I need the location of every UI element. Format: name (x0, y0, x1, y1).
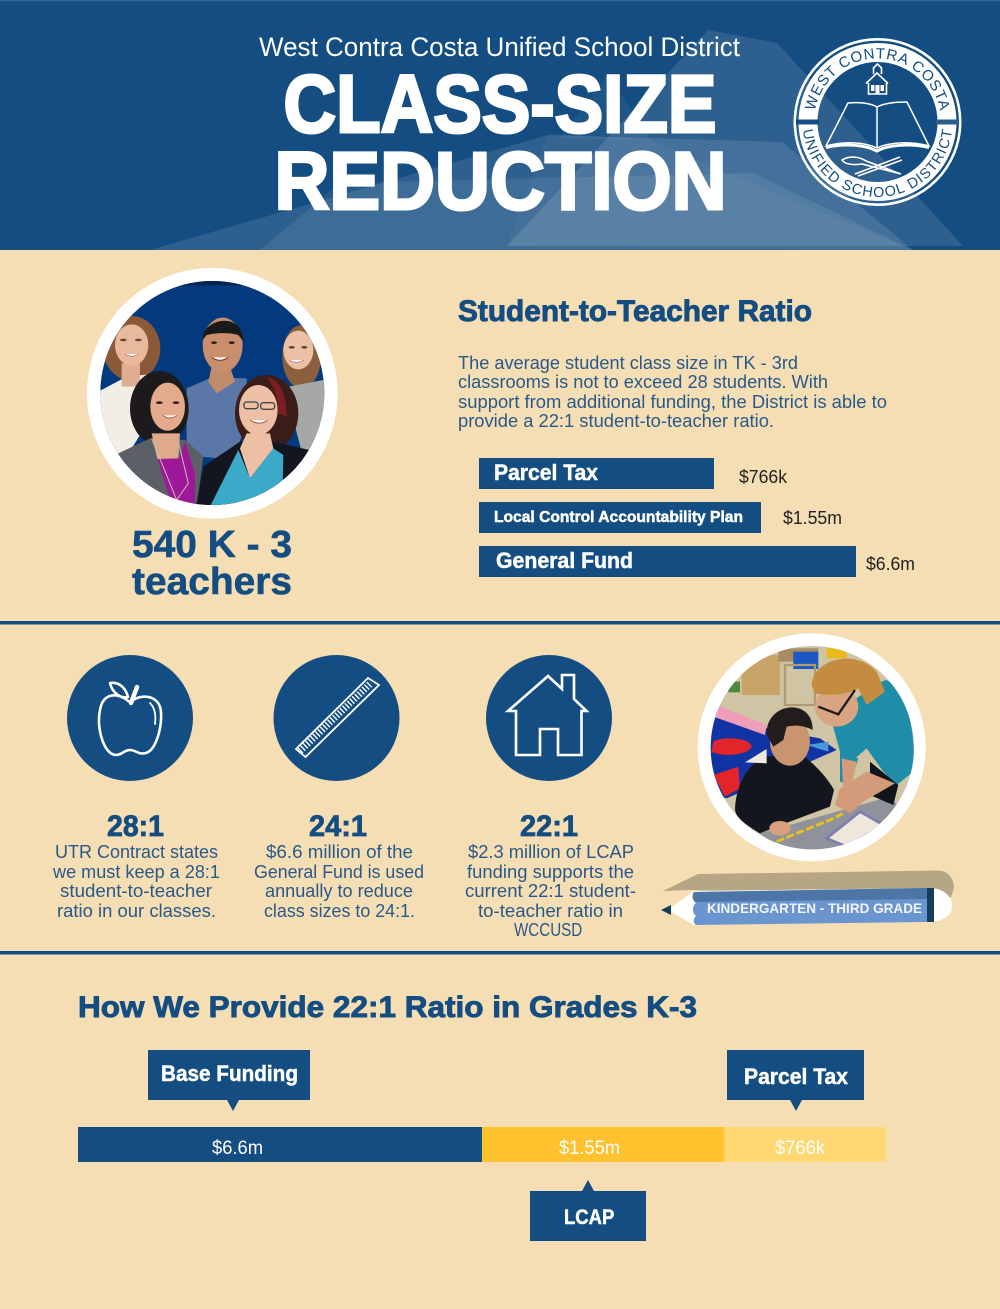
ratio column: 24:1: $6.6 million of the (266, 841, 413, 862)
ratio column: 24:1: annually to reduce (265, 880, 413, 901)
callout: base funding (148, 1050, 310, 1111)
seal pencil and compass (842, 157, 902, 176)
teacher photo (87, 268, 338, 519)
segment: lcap: $1.55m (559, 1138, 620, 1159)
ratio column: 24:1 (254, 810, 424, 921)
ratio column: 28:1: 28:1 (107, 810, 164, 843)
ratio description: provide a 22:1 student-to-teacher ratio. (458, 410, 774, 431)
teacher count: 540 K - 3 (132, 524, 292, 566)
icon: apple (67, 655, 193, 781)
funding bar: general fund (479, 546, 915, 577)
ratio column: 28:1: ratio in our classes. (57, 900, 216, 921)
pencil label: kindergarten - third grade (661, 870, 954, 925)
funding bar: general fund: $6.6m (866, 553, 915, 574)
segment: parcel tax: $766k (775, 1138, 825, 1159)
ratio description (458, 352, 887, 431)
ratio column: 24:1: class sizes to 24:1. (264, 900, 415, 921)
ratio column: 22:1: current 22:1 student- (465, 880, 636, 901)
segment: lcap (482, 1127, 724, 1162)
main title: REDUCTION (274, 136, 726, 227)
ratio column: 22:1: funding supports the (467, 861, 634, 882)
ratio column: 22:1: $2.3 million of LCAP (468, 841, 634, 862)
seal schoolhouse (866, 64, 888, 94)
stacked funding bar (78, 1127, 886, 1162)
icon: ruler (274, 655, 400, 781)
ratio column: 24:1: General Fund is used (254, 861, 424, 882)
segment: parcel tax (724, 1127, 886, 1162)
funding bar: general fund: General Fund (496, 548, 633, 573)
header banner (0, 0, 1000, 250)
ratio column: 22:1 (465, 810, 636, 940)
funding bar: parcel tax: $766k (739, 466, 788, 487)
ratio column: 24:1: 24:1 (309, 810, 367, 843)
classroom photo (698, 633, 926, 861)
teacher count (132, 524, 292, 603)
ratio column: 28:1: UTR Contract states (55, 841, 218, 862)
heading: how we provide 22:1: How We Provide 22:1 Ratio in Grades K-3 (78, 991, 697, 1024)
seal open book (826, 102, 929, 151)
segment: base funding (78, 1127, 482, 1162)
icon: house (486, 655, 612, 781)
funding bar: local control accountability plan: $1.55m (783, 507, 842, 528)
main title (274, 59, 726, 227)
teacher count: teachers (132, 561, 292, 603)
ratio column: 22:1: to-teacher ratio in (478, 900, 623, 921)
ratio description: classrooms is not to exceed 28 students. With (458, 371, 828, 392)
header subtitle: West Contra Costa Unified School District (259, 32, 740, 62)
ratio description: support from additional funding, the District is able to (458, 391, 887, 412)
pencil label: kindergarten - third grade: KINDERGARTEN - THIRD GRADE (707, 900, 922, 916)
district seal logo (794, 38, 962, 206)
ratio column: 22:1: 22:1 (520, 810, 578, 843)
heading: student-to-teacher ratio: Student-to-Teacher Ratio (458, 295, 812, 328)
callout: lcap: LCAP (564, 1206, 614, 1229)
callout: base funding: Base Funding (161, 1061, 298, 1086)
segment: base funding: $6.6m (212, 1138, 263, 1159)
funding bar: parcel tax (479, 458, 788, 489)
district seal logo: UNIFIED SCHOOL DISTRICT (803, 128, 952, 198)
funding bar: parcel tax: Parcel Tax (494, 460, 599, 485)
ratio description: The average student class size in TK - 3rd (458, 352, 798, 373)
ratio column: 28:1 (52, 810, 220, 921)
callout: lcap (530, 1180, 646, 1241)
ratio column: 22:1: WCCUSD (514, 920, 582, 940)
ratio column: 28:1: we must keep a 28:1 (52, 861, 220, 882)
main title: CLASS-SIZE (284, 59, 716, 150)
callout: parcel tax (727, 1050, 864, 1111)
callout: parcel tax: Parcel Tax (744, 1064, 849, 1089)
ratio column: 28:1: student-to-teacher (60, 880, 212, 901)
district seal logo: WEST CONTRA COSTA (804, 48, 950, 111)
funding bar: local control accountability plan: Local Control Accountability Plan (494, 509, 743, 526)
funding bar: local control accountability plan (479, 502, 842, 533)
